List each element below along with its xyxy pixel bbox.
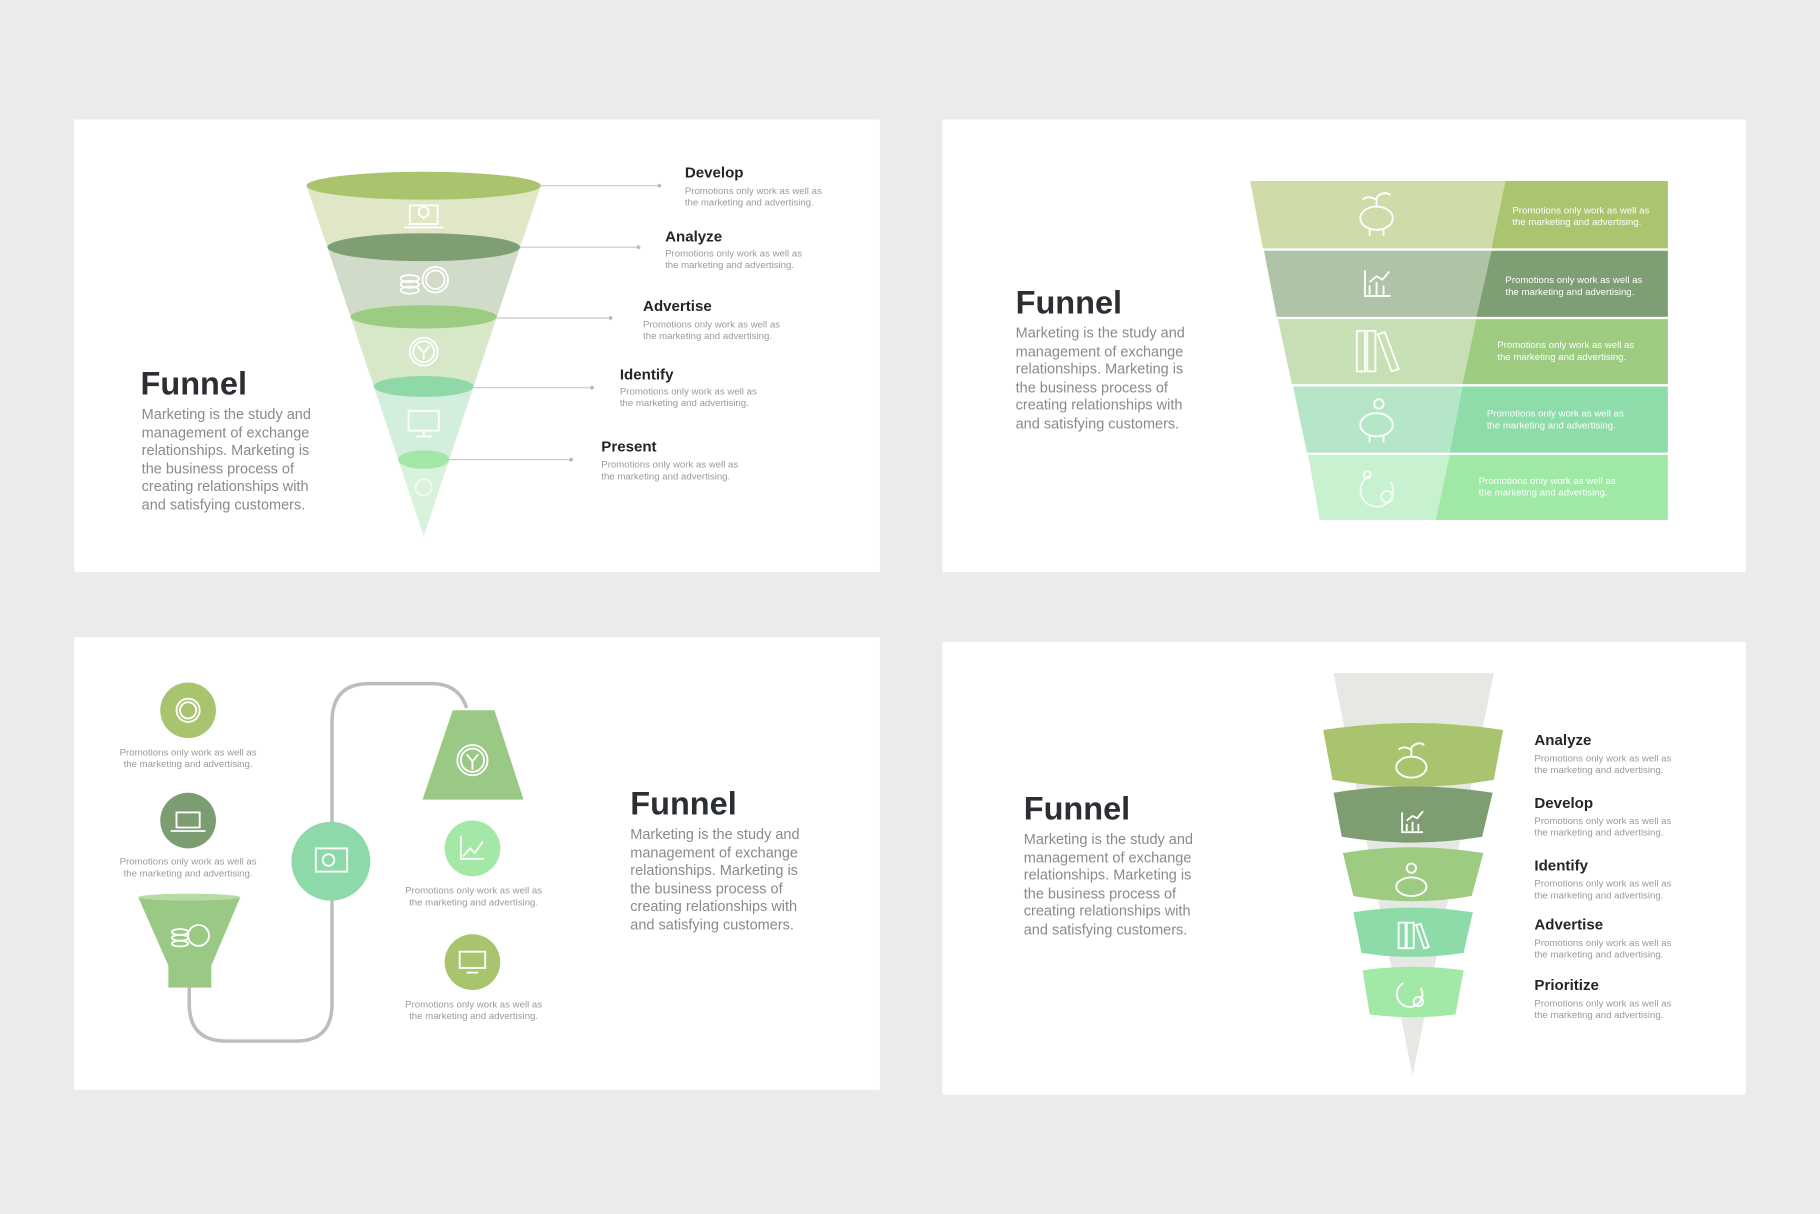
panel: stacked bar funnel: Promotions only work as well as <box>1479 476 1616 487</box>
label: Develop: Promotions only work as well as <box>1534 816 1672 827</box>
label: Analyze: Promotions only work as well as <box>1534 753 1672 764</box>
label: Identify: the marketing and advertising. <box>1534 890 1663 901</box>
body text: the business process of <box>1024 886 1177 902</box>
label: Prioritize: Promotions only work as well as <box>1534 998 1672 1009</box>
label: Advertise <box>1534 917 1672 961</box>
body text: management of exchange <box>1024 850 1191 866</box>
panel: banded funnel <box>942 642 1746 1094</box>
panel: stacked bar funnel <box>942 120 1746 572</box>
body text: and satisfying customers. <box>1024 922 1187 938</box>
label: Prioritize: the marketing and advertising. <box>1534 1010 1663 1021</box>
label: Advertise: Advertise <box>1534 917 1603 934</box>
bar texts: the marketing and advertising. <box>1512 217 1641 228</box>
label: Present: Promotions only work as well as <box>601 460 738 471</box>
panel: stacked bar funnel: the marketing and advertising. <box>1497 352 1626 363</box>
bar texts: Promotions only work as well as <box>1512 206 1649 217</box>
circle: chart: the marketing and advertising. <box>409 897 538 908</box>
panel: pipeline funnel <box>74 637 880 1090</box>
label: Identify: the marketing and advertising. <box>620 398 749 409</box>
label: Identify: Promotions only work as well as <box>620 387 757 398</box>
label: Analyze: the marketing and advertising. <box>665 260 794 271</box>
circle: euro: the marketing and advertising. <box>124 759 253 770</box>
label: Analyze: Promotions only work as well as <box>665 248 802 259</box>
cone chart <box>306 172 541 536</box>
label: Advertise: the marketing and advertising. <box>643 331 772 342</box>
circle: monitor: Promotions only work as well as <box>405 999 542 1010</box>
title: Funnel <box>1016 284 1122 320</box>
body text: the business process of <box>1016 380 1169 396</box>
label: Develop: the marketing and advertising. <box>1534 828 1663 839</box>
body text: Marketing is the study and <box>1016 326 1185 342</box>
body text: relationships. Marketing is <box>1016 362 1183 378</box>
circle: euro <box>120 682 257 770</box>
label: Identify: Identify <box>620 367 674 384</box>
body text: and satisfying customers. <box>630 918 794 934</box>
body text: and satisfying customers. <box>142 498 305 514</box>
label: Develop: Develop <box>1534 795 1593 812</box>
body text: creating relationships with <box>630 899 797 915</box>
circle: euro: Promotions only work as well as <box>120 748 257 759</box>
panel: stacked bar funnel: Promotions only work as well as <box>1487 409 1624 420</box>
title: Funnel <box>1024 790 1130 826</box>
body text: management of exchange <box>1016 344 1183 360</box>
connector path <box>189 684 467 1041</box>
label: Prioritize: Prioritize <box>1534 977 1599 994</box>
panel: stacked bar funnel: the marketing and advertising. <box>1505 287 1634 298</box>
circle: laptop: Promotions only work as well as <box>120 857 257 868</box>
label: Develop <box>1534 795 1672 839</box>
panel: stacked bar funnel: the marketing and advertising. <box>1479 488 1608 499</box>
body text: Marketing is the study and <box>142 407 311 423</box>
label: Analyze: the marketing and advertising. <box>1534 765 1663 776</box>
icons <box>404 205 443 227</box>
funnel: top right <box>423 710 524 800</box>
label: Present <box>601 438 738 482</box>
label: Present: the marketing and advertising. <box>601 471 730 482</box>
body text: relationships. Marketing is <box>1024 868 1191 884</box>
body text: management of exchange <box>142 426 309 442</box>
label: Advertise: Promotions only work as well as <box>1534 938 1672 949</box>
funnel: bottom left <box>138 894 240 988</box>
label: Advertise: Promotions only work as well as <box>643 319 780 330</box>
label: Analyze <box>1534 732 1672 776</box>
label: Identify <box>620 367 757 409</box>
body text: Marketing is the study and <box>630 827 800 843</box>
label: Prioritize <box>1534 977 1672 1021</box>
label: Present: Present <box>601 438 657 455</box>
circle: chart: Promotions only work as well as <box>405 886 542 897</box>
label: Advertise <box>643 298 780 342</box>
circle: safe <box>291 822 370 901</box>
label: Identify: Promotions only work as well as <box>1534 879 1672 890</box>
circle: monitor <box>405 934 542 1022</box>
bar icons <box>1360 193 1393 236</box>
body text: relationships. Marketing is <box>630 863 798 879</box>
circle: chart <box>405 821 542 908</box>
leader lines <box>449 184 661 461</box>
body text: and satisfying customers. <box>1016 416 1179 432</box>
label: Develop: the marketing and advertising. <box>685 197 814 208</box>
panel: stacked bar funnel: Promotions only work as well as <box>1497 340 1634 351</box>
body text: Marketing is the study and <box>1024 832 1193 848</box>
label: Identify <box>1534 857 1672 901</box>
body text: the business process of <box>142 462 295 478</box>
panel: stacked bar funnel: the marketing and advertising. <box>1487 420 1616 431</box>
circle: laptop: the marketing and advertising. <box>124 868 253 879</box>
body text: relationships. Marketing is <box>142 443 309 459</box>
label: Identify: Identify <box>1534 857 1589 874</box>
label: Analyze <box>665 228 802 271</box>
label: Develop: Promotions only work as well as <box>685 186 822 197</box>
panel: stacked bar funnel: Promotions only work as well as <box>1505 275 1643 286</box>
label: Analyze: Analyze <box>665 228 722 245</box>
body text: creating relationships with <box>142 479 309 495</box>
label: Develop: Develop <box>685 165 743 182</box>
band funnel chart <box>1323 673 1503 1076</box>
body text: management of exchange <box>630 846 798 862</box>
label: Advertise: Advertise <box>643 298 712 315</box>
body text: the business process of <box>630 882 784 898</box>
panel: cone funnel <box>74 120 880 572</box>
body text: creating relationships with <box>1016 398 1182 414</box>
label: Analyze: Analyze <box>1534 732 1591 749</box>
body text: creating relationships with <box>1024 904 1191 920</box>
title: Funnel <box>141 366 247 402</box>
bars <box>1250 181 1668 520</box>
title: Funnel <box>630 786 737 822</box>
circle: monitor: the marketing and advertising. <box>409 1011 538 1022</box>
label: Advertise: the marketing and advertising. <box>1534 950 1663 961</box>
circle: laptop <box>120 793 257 879</box>
label: Develop <box>685 165 822 208</box>
